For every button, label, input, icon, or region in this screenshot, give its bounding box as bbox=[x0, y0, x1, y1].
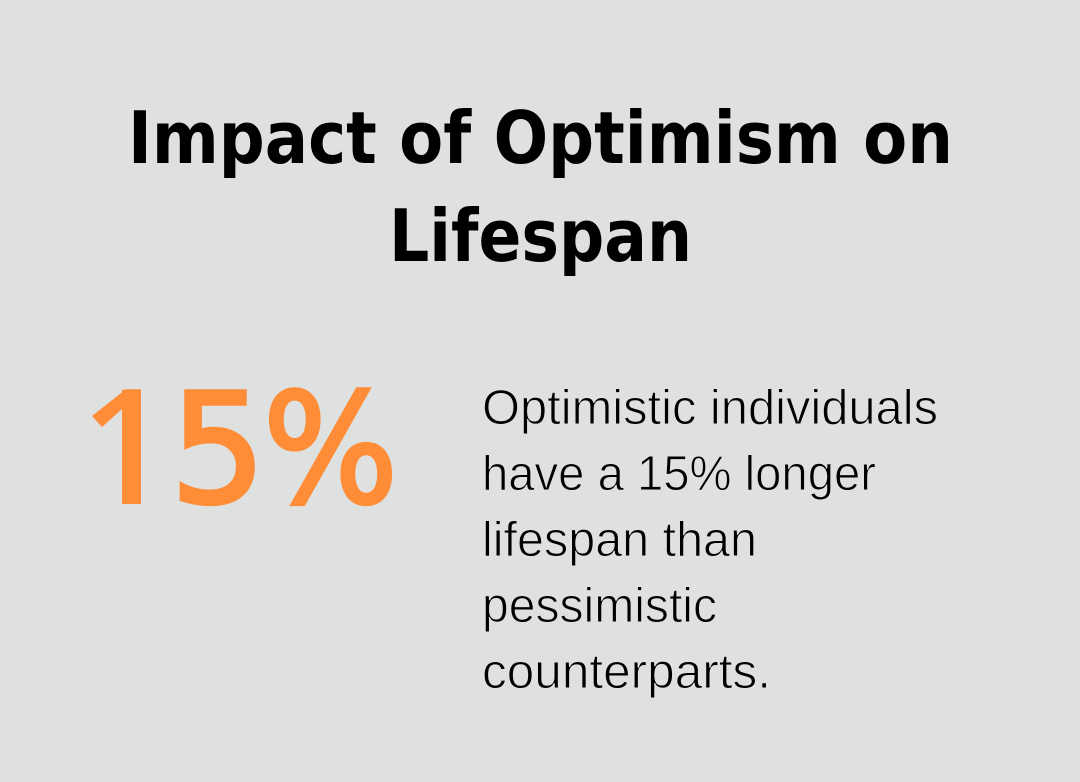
description text: have a 15% longer bbox=[482, 447, 876, 501]
title bbox=[128, 96, 953, 278]
title: Lifespan bbox=[389, 194, 692, 278]
description text: pessimistic bbox=[482, 579, 717, 633]
big statistic: 15% bbox=[83, 361, 398, 538]
title: Impact of Optimism on bbox=[128, 96, 953, 180]
description text bbox=[482, 381, 938, 699]
big statistic: 15%: % bbox=[263, 361, 398, 538]
description text: lifespan than bbox=[482, 513, 757, 567]
description text: counterparts. bbox=[482, 645, 771, 699]
big statistic: 15%: 5 bbox=[170, 361, 266, 538]
big statistic: 15%: 1 bbox=[83, 361, 180, 538]
description text: Optimistic individuals bbox=[482, 381, 938, 435]
